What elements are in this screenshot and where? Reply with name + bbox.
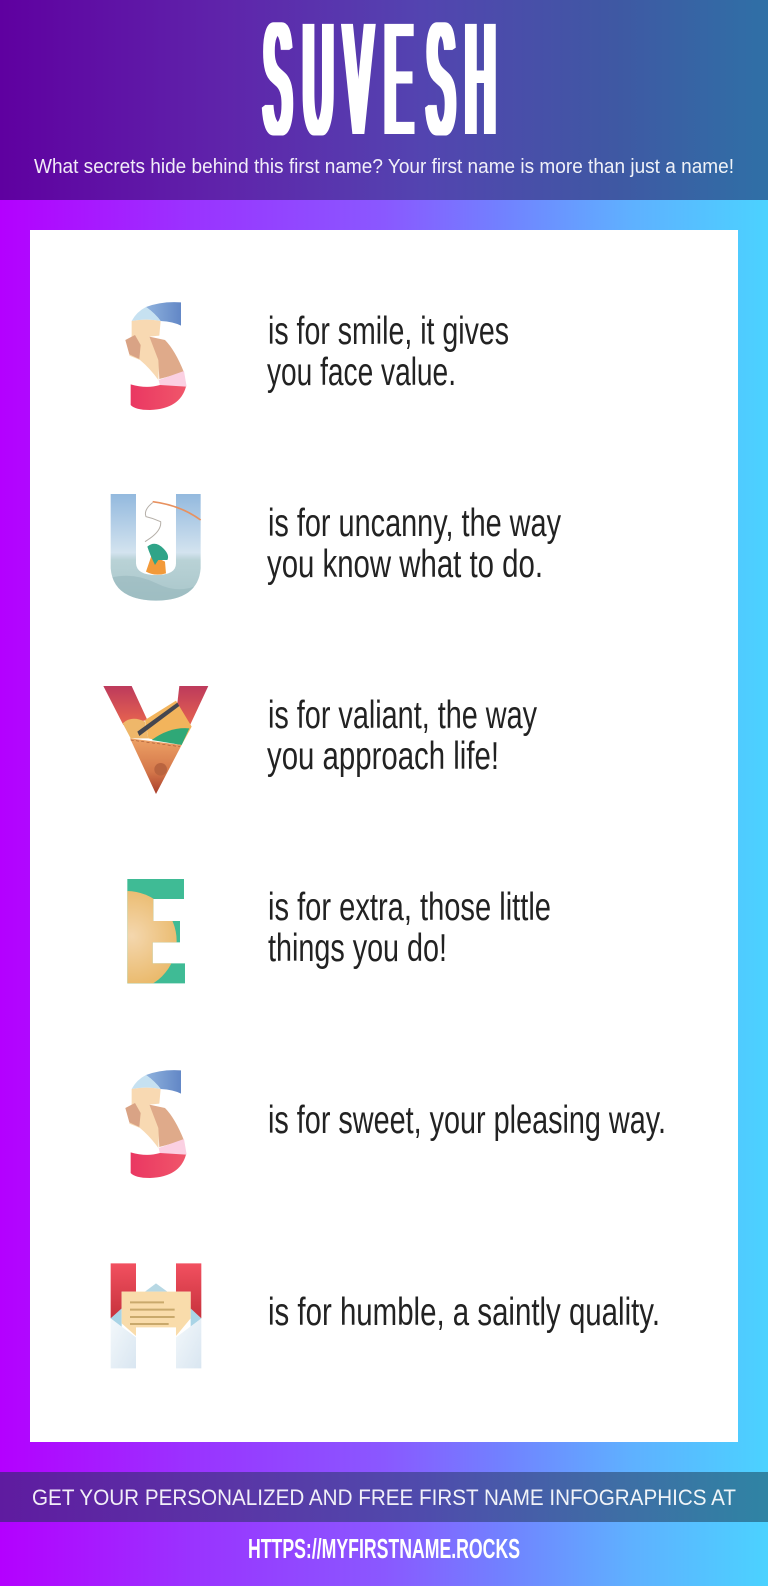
icon: letter U, fishing <box>110 494 202 601</box>
icon: letter S, handshake <box>125 302 187 410</box>
text: E line <box>268 886 551 970</box>
text: S line <box>267 310 509 394</box>
icon: letter S, handshake <box>125 1070 187 1178</box>
footer url: HTTPS://MYFIRSTNAME.ROCKS <box>248 1533 520 1564</box>
icon: letter E, coin <box>127 879 185 984</box>
text: E line: is for extra, those little <box>268 886 551 929</box>
panel: letters <box>30 230 738 1442</box>
header band <box>0 0 768 200</box>
subtitle: What secrets hide behind this first name? Your first name is more than just a name! <box>34 156 734 178</box>
text: S line: is for smile, it gives <box>268 310 509 353</box>
footer band <box>0 1472 768 1522</box>
icon: letter V, wallet <box>103 686 208 794</box>
text: S line: you face value. <box>267 351 456 394</box>
footer call to action: GET YOUR PERSONALIZED AND FREE FIRST NAME INFOGRAPHICS AT <box>32 1485 736 1510</box>
text: U line: you know what to do. <box>267 543 543 586</box>
text: U line: is for uncanny, the way <box>268 502 561 545</box>
text: E line: things you do! <box>268 927 447 970</box>
text: V line <box>267 694 537 778</box>
text: V line: is for valiant, the way <box>268 694 537 737</box>
text: V line: you approach life! <box>267 735 499 778</box>
icon: letter H, envelope <box>111 1263 201 1368</box>
text: U line <box>267 502 561 586</box>
